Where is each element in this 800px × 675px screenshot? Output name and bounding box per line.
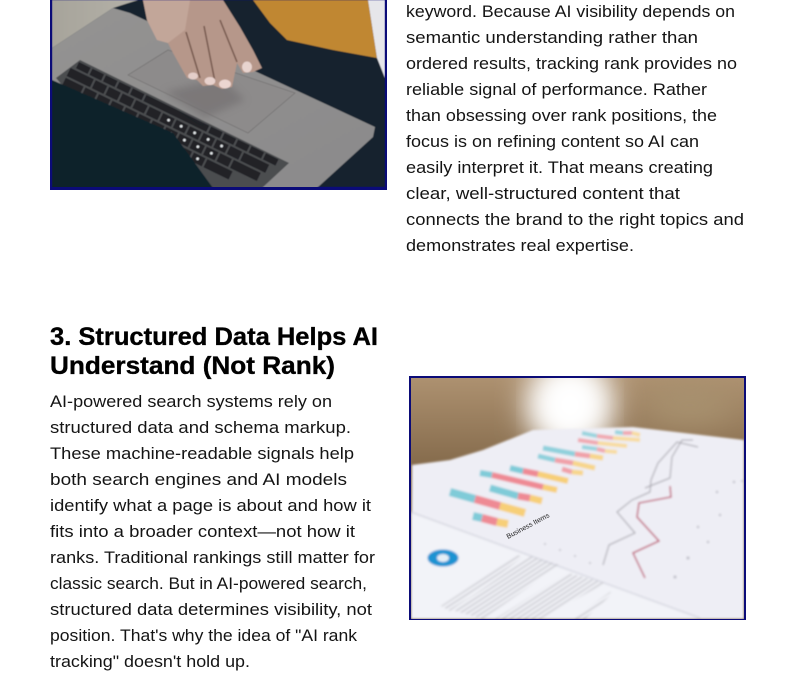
text block: section 2 continuation: demonstrates real expertise.: [406, 236, 634, 255]
line chart: [603, 440, 698, 578]
text block: section 3 body: fits into a broader context—not how it: [50, 522, 355, 541]
text block: section 2 continuation: semantic understanding rather than: [406, 28, 698, 47]
heading: section 3: [50, 323, 378, 380]
text block: section 3 body: AI-powered search systems rely on: [50, 392, 332, 411]
text block: section 3 body: both search engines and AI models: [50, 470, 347, 489]
text block: section 2 continuation: keyword. Because AI visibility depends on: [406, 2, 735, 21]
text block: section 3 body: These machine-readable signals help: [50, 444, 354, 463]
text block: section 3 body: ranks. Traditional rankings still matter for: [50, 548, 375, 567]
text block: section 2 continuation: reliable signal of performance. Rather: [406, 80, 707, 99]
text block: section 2 continuation: than obsessing over rank positions, the: [406, 106, 717, 125]
text block: section 2 continuation: easily interpret it. That means creating: [406, 158, 713, 177]
text block: section 3 body: [50, 392, 375, 671]
label: Business Items: Business Items: [506, 512, 551, 541]
text block: section 3 body: classic search. But in AI-powered search,: [50, 574, 367, 593]
image: hand on laptop: [50, 0, 387, 195]
text block: section 3 body: structured data determines visibility, not: [50, 600, 372, 619]
trackpad: [128, 50, 295, 133]
heading: section 3: 3. Structured Data Helps AI: [50, 323, 378, 351]
image: printed business charts: [409, 360, 746, 620]
text block: section 2 continuation: clear, well-structured content that: [406, 184, 680, 203]
text block: section 2 continuation: connects the brand to the right topics and: [406, 210, 744, 229]
text block: section 2 continuation: ordered results, tracking rank provides no: [406, 54, 737, 73]
table text: [441, 555, 613, 619]
text block: section 2 continuation: focus is on refining content so AI can: [406, 132, 699, 151]
text block: section 3 body: identify what a page is about and how it: [50, 496, 371, 515]
blue logo: [428, 550, 458, 566]
hand: [143, 0, 262, 89]
laptop screen: [52, 80, 213, 188]
heading: section 3: Understand (Not Rank): [50, 352, 335, 380]
keyboard: [56, 60, 289, 195]
text block: section 3 body: position. That's why the idea of "AI rank: [50, 626, 358, 645]
text block: section 3 body: tracking" doesn't hold up.: [50, 652, 250, 671]
text block: section 3 body: structured data and schema markup.: [50, 418, 351, 437]
bar chart: [450, 432, 640, 524]
text block: section 2 continuation: [406, 2, 744, 255]
